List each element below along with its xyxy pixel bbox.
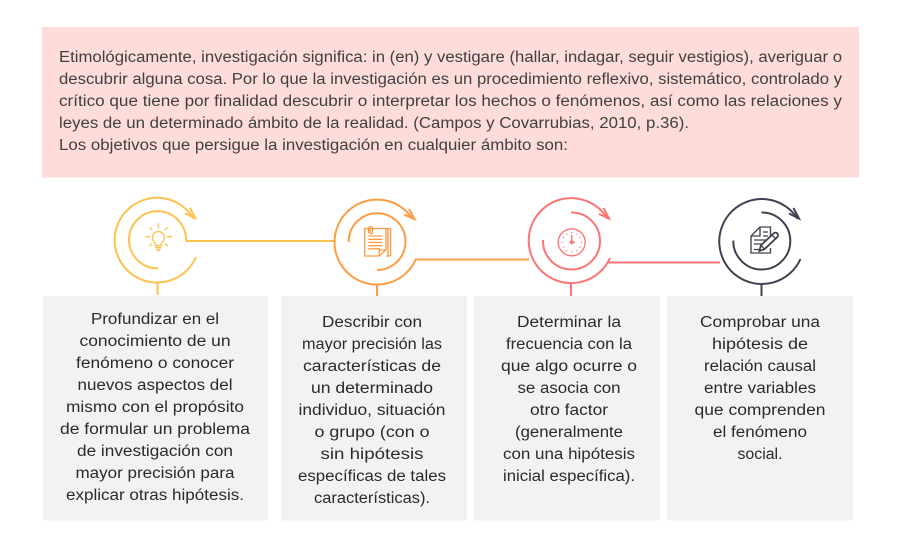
text: card 1 description: de formular un problema [60,421,250,438]
text: card 2 description: individuo, situación [298,402,446,419]
text: card 1 description: conocimiento de un [80,333,230,350]
text: card 4 description: social. [738,446,782,463]
text: card 4 description: el fenómeno [713,424,807,441]
card 3: determine frequency [474,296,660,520]
text: card 4 description: Comprobar una [700,314,820,331]
text: card 1 description: nuevos aspectos del [78,377,232,394]
text: card 2 description: o grupo (con o [314,424,430,441]
icon: form and pencil [751,227,778,253]
text: card 2 description: un determinado [311,380,433,397]
connector: orange line from second to third circle [415,258,529,260]
connector: coral line from third to fourth circle [608,262,720,264]
text: card 4 description: hipótesis de [712,336,808,353]
spiral arrow [115,198,196,295]
panel: introductory definition [42,27,859,178]
step 3: spiral with clock icon [529,198,610,296]
text: definition paragraph: crítico que tiene por finalidad descubrir o interpretar los hechos o fenómenos, así como las relaciones y [59,93,842,110]
text: card 2 description [298,314,446,507]
text: card 3 description: inicial específica). [503,468,635,485]
text: card 1 description: mayor precisión para [76,465,235,482]
connector: yellow line from first to second circle [186,240,334,242]
text: definition paragraph: descubrir alguna cosa. Por lo que la investigación es un procedimiento reflexivo, sistemático, controlado y [59,71,842,88]
text: card 2 description: específicas de tales [298,468,446,485]
text: card 4 description: relación causal [704,358,816,375]
card 1: deepen knowledge [43,296,268,520]
text: card 3 description: frecuencia con la [506,336,632,353]
text: card 1 description: mismo con el propósito [66,399,244,416]
text: card 3 description [501,314,637,485]
text: card 2 description: sin hipótesis [320,446,424,463]
text: card 2 description: características). [314,490,430,507]
text: card 1 description: fenómeno o conocer [76,355,234,372]
step 1: spiral with light bulb icon [115,198,196,295]
card 4: test causal hypothesis [667,296,853,520]
spiral arrow [529,198,610,296]
text: card 1 description: explicar otras hipótesis. [66,487,244,504]
spiral arrow [335,200,416,296]
text: card 1 description: Profundizar en el [91,311,219,328]
text: card 2 description: mayor precisión las [302,336,442,353]
text: card 4 description [694,314,826,463]
text: card 1 description [60,311,250,504]
spiral arrow [719,199,800,296]
text: card 3 description: se asocia con [518,380,620,397]
text: definition paragraph: Los objetivos que persigue la investigación en cualquier ámbito son: [59,137,568,154]
text: card 4 description: que comprenden [694,402,826,419]
text: card 2 description: Describir con [322,314,422,331]
text: card 2 description: características de [303,358,441,375]
step 2: spiral with document icon [335,200,416,296]
text: definition paragraph: Etimológicamente, investigación significa: in (en) y vestigare (hallar, indagar, seguir vestigios), averiguar o [59,49,842,66]
text: card 3 description: (generalmente [515,424,623,441]
text: card 4 description: entre variables [704,380,816,397]
text: card 3 description: Determinar la [517,314,621,331]
card 2: describe characteristics [281,296,467,520]
icon: clock [558,229,585,256]
text: card 1 description: de investigación con [77,443,233,460]
text: card 3 description: que algo ocurre o [501,358,637,375]
text: definition paragraph [59,49,842,154]
step 4: spiral with form and pencil icon [719,199,800,296]
text: card 3 description: con una hipótesis [503,446,635,463]
icon: light bulb [145,223,172,250]
text: definition paragraph: leyes de un determinado ámbito de la realidad. (Campos y Covarrubias, 2010, p.36). [59,115,689,132]
text: card 3 description: otro factor [530,402,608,419]
icon: clipped document [365,226,391,256]
